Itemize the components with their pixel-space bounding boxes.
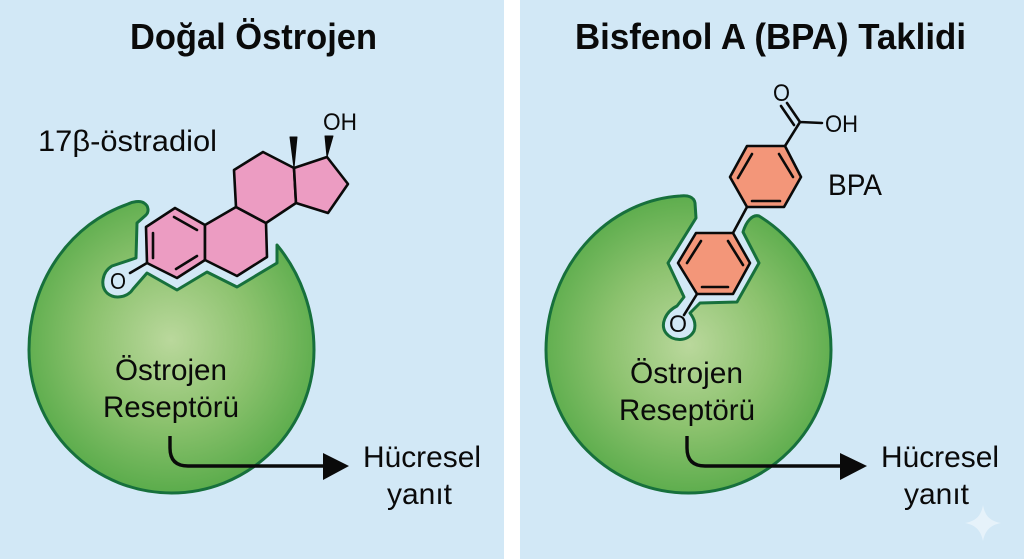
atom: O: O [110,268,126,294]
label: BPA: BPA [828,169,882,202]
atom: OH: OH [825,111,858,138]
panel: BPA mimic [520,0,1024,559]
ring B [205,207,267,276]
atom: OH: OH [323,109,357,136]
response label line 2: yanıt [387,478,452,511]
receptor label: Östrojen [115,354,227,387]
response label line 2: yanıt [904,478,969,511]
receptor: green pocket shape [29,201,314,493]
panel: natural estrogen [0,0,504,559]
arrow [170,436,349,480]
response label: Hücresel [881,441,999,474]
upper ring [730,146,801,207]
wedge bonds [290,136,333,168]
bonds [684,103,822,315]
title: Doğal Östrojen: Doğal Östrojen [130,16,377,57]
molecule: 17β-estradiol [130,136,348,278]
atom: O (carbonyl): O [773,80,790,107]
arrow [687,436,867,480]
icon: sparkle watermark [965,505,1001,541]
ring A [146,208,205,278]
ring C [234,152,296,223]
receptor label line 2: Reseptörü [619,394,755,427]
label: 17β-östradiol: 17β-östradiol [38,125,217,158]
double bonds [130,217,197,273]
response label: Hücresel [363,441,481,474]
receptor label line 2: Reseptörü [103,391,239,424]
lower ring [678,233,750,294]
ring D [294,157,348,213]
atom: O (hydroxyl): O [669,311,687,338]
title: Bisfenol A Taklidi: Bisfenol A (BPA) Taklidi [575,16,966,57]
receptor label: Östrojen [630,357,743,390]
receptor: green pocket shape [546,196,831,493]
molecule: BPA [678,103,822,315]
